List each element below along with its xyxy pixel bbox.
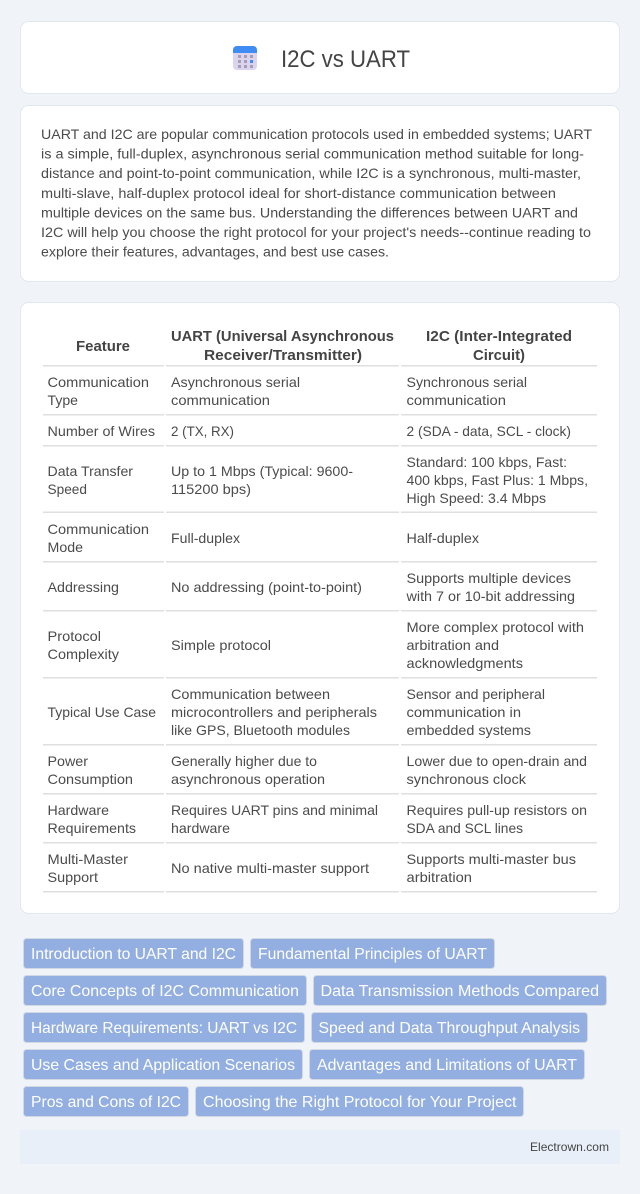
row: addressing: No addressing (point-to-point) — [171, 579, 362, 595]
row: power consumption — [48, 753, 587, 787]
row: hardware requirements: Hardware — [48, 802, 109, 818]
icon: calendar grid — [233, 46, 257, 70]
tag: speed analysis — [312, 1012, 588, 1042]
tag: data transmission — [314, 976, 606, 1006]
row: data transfer speed: Data Transfer — [48, 463, 133, 479]
row: addressing: Addressing — [48, 579, 119, 595]
panel: introduction — [20, 106, 620, 282]
row: power consumption: synchronous clock — [406, 771, 527, 787]
row: multi-master support: Support — [48, 869, 98, 885]
row: number of wires: 2 (SDA - data, SCL - clock) — [406, 423, 571, 439]
row: data transfer speed: High Speed: 3.4 Mbps — [406, 490, 546, 506]
text block: introduction paragraph: explore their features, advantages, and best use cases. — [41, 244, 389, 260]
table header row: UART (Universal Asynchronous — [171, 328, 394, 345]
row: communication type: Type — [48, 392, 78, 408]
row: hardware requirements: Requirements — [48, 820, 136, 836]
tag: use cases — [24, 1050, 302, 1080]
row: data transfer speed: Speed — [48, 481, 87, 497]
row: typical use case: microcontrollers and peripherals — [171, 704, 377, 720]
tag: fundamental principles: Fundamental Principles of UART — [258, 946, 487, 963]
row: multi-master support — [48, 851, 576, 885]
row: multi-master support: No native multi-master support — [171, 860, 369, 876]
row: power consumption: asynchronous operation — [171, 771, 325, 787]
row: protocol complexity: Complexity — [48, 646, 119, 662]
footer: Electrown.com — [530, 1140, 609, 1154]
row: number of wires — [48, 423, 571, 439]
row: communication mode: Mode — [48, 539, 83, 555]
row: hardware requirements: Requires UART pins and minimal — [171, 802, 378, 818]
tag: advantages: Advantages and Limitations of UART — [317, 1057, 577, 1074]
row: typical use case: Communication between — [171, 686, 330, 702]
row: typical use case: Sensor and peripheral — [406, 686, 545, 702]
row: data transfer speed: Standard: 100 kbps, Fast: — [406, 454, 567, 470]
row: power consumption: Lower due to open-drain and — [406, 753, 587, 769]
row: number of wires: 2 (TX, RX) — [171, 423, 234, 439]
row: protocol complexity — [48, 619, 584, 671]
tag: choosing protocol — [196, 1086, 524, 1116]
text block: introduction paragraph: multi-slave, half-duplex protocol ideal for short-distance communication between — [41, 185, 556, 201]
tag: core concepts — [24, 976, 306, 1006]
row: power consumption: Consumption — [48, 771, 133, 787]
row: number of wires: Number of Wires — [48, 423, 155, 439]
row: communication type: Synchronous serial — [406, 374, 527, 390]
tag: choosing protocol: Choosing the Right Protocol for Your Project — [203, 1094, 517, 1111]
row: addressing — [48, 570, 575, 604]
panel: topic tags — [24, 938, 606, 1116]
row: hardware requirements: hardware — [171, 820, 230, 836]
text block: introduction paragraph: UART and I2C are popular communication protocols used in embedded systems; UART — [41, 126, 592, 142]
row: addressing: with 7 or 10-bit addressing — [405, 588, 575, 604]
row: data transfer speed: 115200 bps) — [171, 481, 251, 497]
row: protocol complexity: arbitration and — [406, 637, 499, 653]
tag: pros and cons — [24, 1086, 188, 1116]
tag: introduction: Introduction to UART and I2C — [31, 946, 236, 963]
text block: introduction paragraph: is a simple, full-duplex, asynchronous serial communication method suitable for long- — [41, 146, 584, 162]
text block: introduction paragraph: multiple devices on the same bus. Understanding the differences between UART and — [41, 204, 578, 220]
tag: core concepts: Core Concepts of I2C Communication — [31, 983, 299, 1000]
tag: pros and cons: Pros and Cons of I2C — [31, 1094, 181, 1111]
text block: introduction paragraph: distance and point-to-point communication, while I2C is a synchronous, multi-master, — [41, 165, 581, 181]
row: typical use case: embedded systems — [406, 722, 531, 738]
row: typical use case: Typical Use Case — [48, 704, 156, 720]
row: communication type: Asynchronous serial — [171, 374, 300, 390]
row: communication mode — [48, 521, 479, 555]
row: communication mode: Half-duplex — [406, 530, 479, 546]
footer — [20, 1130, 620, 1164]
row: communication mode: Communication — [48, 521, 149, 537]
row: typical use case: like GPS, Bluetooth modules — [171, 722, 350, 738]
table header row: Receiver/Transmitter) — [204, 347, 362, 364]
table header row: I2C (Inter-Integrated — [426, 328, 572, 345]
row: protocol complexity: Protocol — [48, 628, 101, 644]
row: protocol complexity: Simple protocol — [171, 637, 271, 653]
row: protocol complexity: acknowledgments — [406, 655, 523, 671]
row: typical use case — [48, 686, 545, 738]
panel: header card — [20, 22, 620, 94]
row: communication type: communication — [171, 392, 270, 408]
row: multi-master support: arbitration — [406, 869, 472, 885]
row: power consumption: Power — [48, 753, 88, 769]
tag: data transmission: Data Transmission Methods Compared — [320, 983, 599, 1000]
row: communication type: communication — [406, 392, 506, 408]
text block: introduction paragraph — [41, 126, 592, 260]
row: multi-master support: Multi-Master — [48, 851, 128, 867]
row: data transfer speed: Up to 1 Mbps (Typical: 9600- — [171, 463, 353, 479]
tag: speed analysis: Speed and Data Throughput Analysis — [318, 1020, 580, 1037]
row: multi-master support: Supports multi-master bus — [406, 851, 576, 867]
row: typical use case: communication in — [406, 704, 521, 720]
row: hardware requirements: SDA and SCL lines — [406, 820, 523, 836]
row: communication type: Communication — [48, 374, 149, 390]
row: power consumption: Generally higher due to — [171, 753, 317, 769]
row: protocol complexity: More complex protocol with — [406, 619, 584, 635]
table header row: Feature — [76, 338, 130, 355]
tag: advantages — [310, 1050, 584, 1080]
text block: introduction paragraph: I2C will help you choose the right protocol for your project's needs--continue reading to — [41, 224, 591, 240]
row: hardware requirements: Requires pull-up resistors on — [406, 802, 587, 818]
row: addressing: Supports multiple devices — [406, 570, 571, 586]
row: data transfer speed: 400 kbps, Fast Plus: 1 Mbps, — [406, 472, 588, 488]
row: communication type — [48, 374, 527, 408]
row: data transfer speed — [48, 454, 588, 506]
title: I2C vs UART — [281, 46, 410, 73]
tag: use cases: Use Cases and Application Scenarios — [31, 1057, 295, 1074]
row: hardware requirements — [48, 802, 587, 836]
tag: hardware requirements — [24, 1012, 304, 1042]
tag: hardware requirements: Hardware Requirements: UART vs I2C — [31, 1020, 297, 1037]
table header row — [76, 328, 572, 364]
row: communication mode: Full-duplex — [171, 530, 240, 546]
table header row: Circuit) — [473, 347, 525, 364]
tag: fundamental principles — [250, 938, 494, 968]
tag: introduction — [24, 938, 244, 968]
panel: comparison table — [20, 302, 620, 914]
